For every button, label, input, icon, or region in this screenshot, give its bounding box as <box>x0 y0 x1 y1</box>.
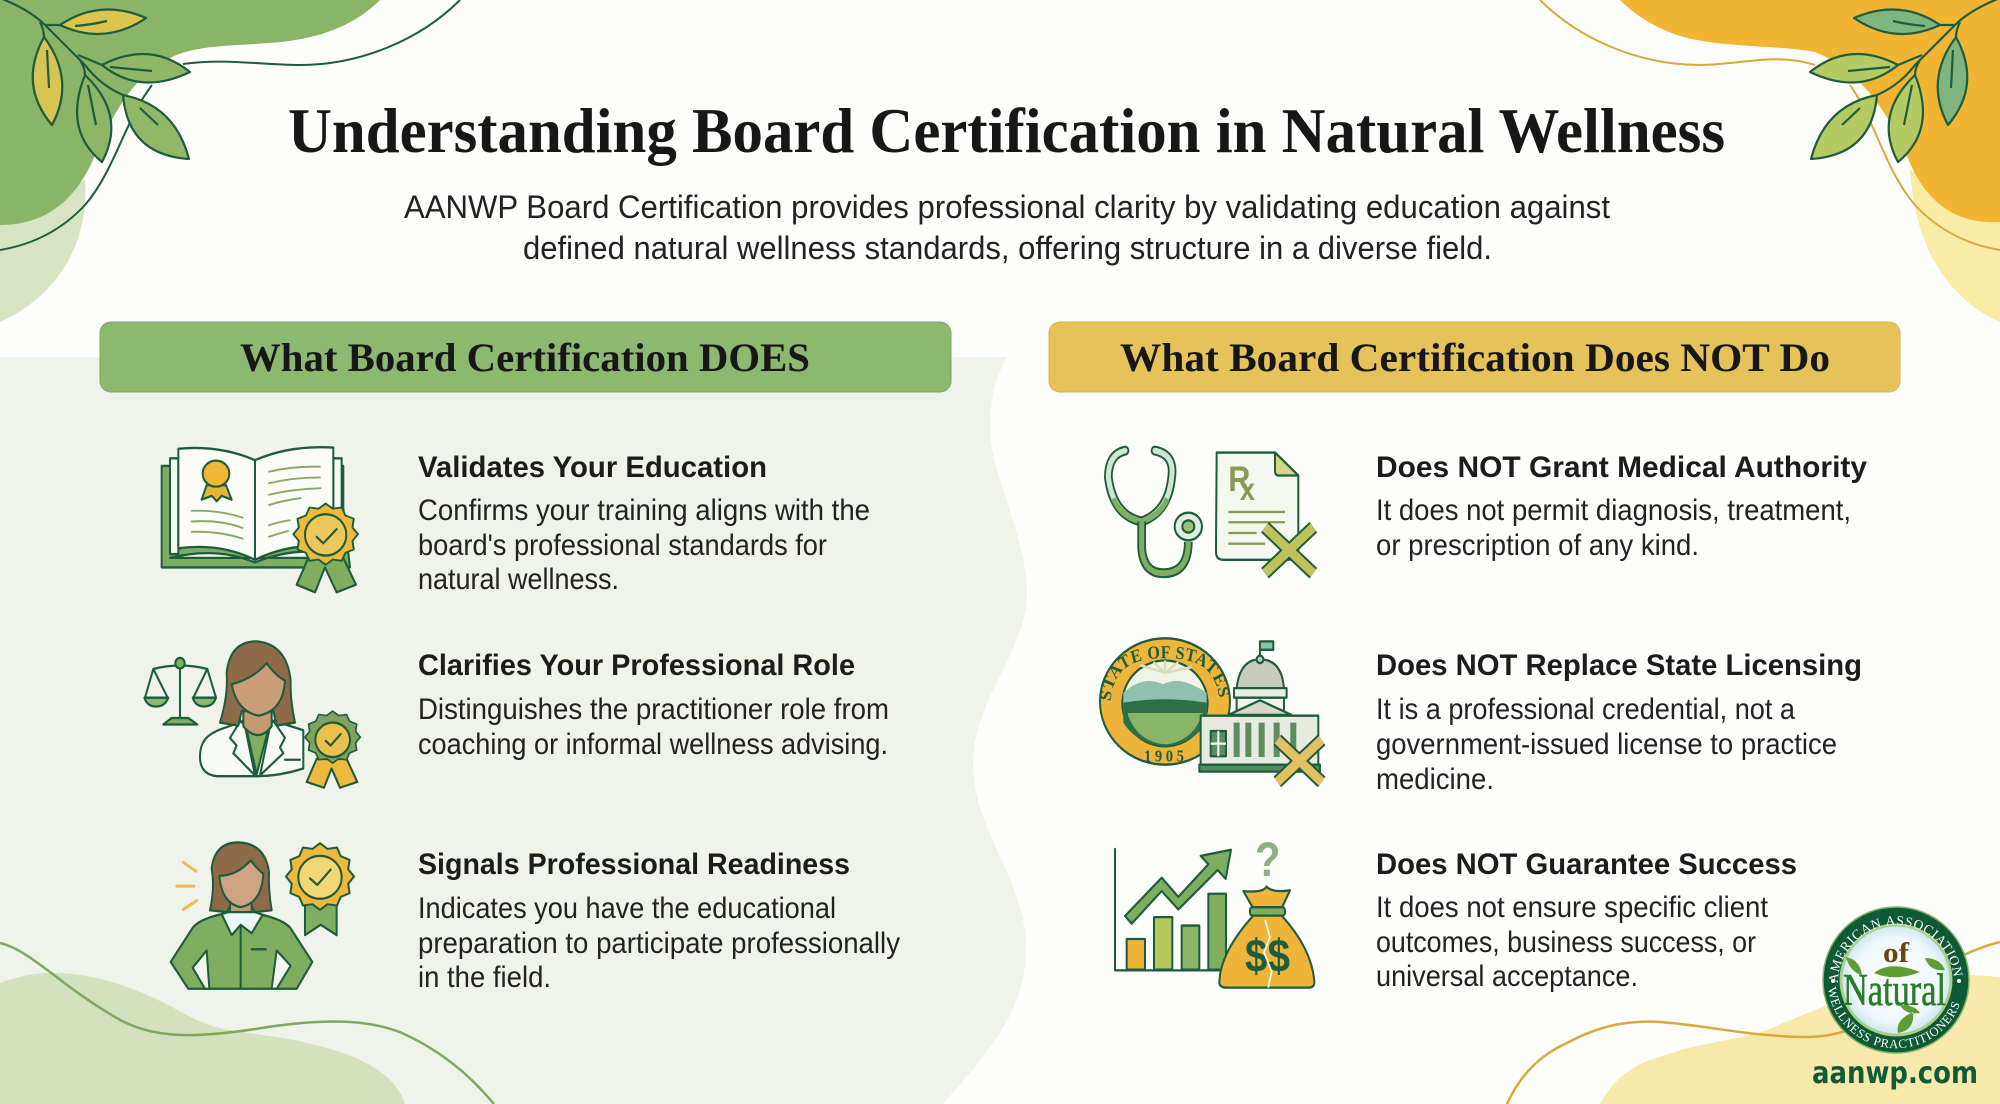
item text: state licensing: medicine. <box>1376 763 1494 796</box>
icon: growth chart and money bag: ? <box>1255 832 1280 886</box>
item text: medical authority: or prescription of any kind. <box>1376 529 1699 562</box>
decoration: bottom left blob and line <box>0 943 494 1104</box>
left panel background <box>0 357 1027 1104</box>
logo: association seal: WELLNESS PRACTITIONERS <box>1828 986 1960 1048</box>
item text: clarifies your professional role: coaching or informal wellness advising. <box>418 728 888 761</box>
item text: guarantee success: Does NOT Guarantee Success <box>1376 848 1797 881</box>
item text: medical authority <box>1376 451 1867 562</box>
item text: signals professional readiness <box>418 848 900 994</box>
logo: association seal: of <box>1883 938 1910 969</box>
icon: state seal and capitol with cross: 1905 <box>1144 748 1184 766</box>
subtitle: AANWP Board Certification provides professional clarity by validating education against <box>404 189 1610 225</box>
icon: open book with seal <box>162 447 358 592</box>
decoration: bottom right blob and line <box>1507 942 2000 1104</box>
decoration: top left blobs <box>0 0 460 322</box>
item text: medical authority: Does NOT Grant Medical Authority <box>1376 451 1867 484</box>
item text: validates your education: Validates Your Education <box>418 451 767 484</box>
item text: validates your education: natural wellness. <box>418 563 619 596</box>
subtitle: defined natural wellness standards, offering structure in a diverse field. <box>523 230 1492 266</box>
heading bar: does: What Board Certification DOES <box>240 335 810 380</box>
logo: association seal: Natural <box>1843 965 1946 1015</box>
item text: validates your education: board's professional standards for <box>418 529 827 562</box>
item text: guarantee success: It does not ensure specific client <box>1376 891 1769 924</box>
icon: state seal and capitol with cross: STATE OF STATES <box>1101 646 1228 700</box>
item text: guarantee success: outcomes, business success, or <box>1376 926 1756 959</box>
item text: clarifies your professional role: Distinguishes the practitioner role from <box>418 693 889 726</box>
icon: growth chart and money bag <box>1115 832 1314 988</box>
heading bar: does not: What Board Certification Does NOT Do <box>1120 335 1830 380</box>
item text: clarifies your professional role <box>418 649 889 761</box>
item text: signals professional readiness: preparation to participate professionally <box>418 927 900 960</box>
icon: state seal and capitol with cross <box>1099 637 1326 788</box>
item text: signals professional readiness: in the field. <box>418 961 551 994</box>
icon: growth chart and money bag: $$ <box>1245 931 1290 982</box>
heading bar: does not <box>1049 322 1900 392</box>
logo: association seal <box>1822 906 1970 1054</box>
heading bar: does <box>100 322 951 392</box>
logo: association seal: AMERICAN ASSOCIATION <box>1829 916 1962 983</box>
website address: aanwp.com <box>1812 1056 1978 1091</box>
decoration: top right blobs <box>1540 0 2000 322</box>
icon: top right leaf branch <box>1810 0 2000 162</box>
item text: validates your education: Confirms your training aligns with the <box>418 494 870 527</box>
item text: signals professional readiness: Signals Professional Readiness <box>418 848 850 881</box>
item text: state licensing: It is a professional credential, not a <box>1376 693 1795 726</box>
subtitle <box>404 189 1610 266</box>
icon: top left leaf branch <box>0 0 190 162</box>
item text: signals professional readiness: Indicates you have the educational <box>418 892 836 925</box>
item text: clarifies your professional role: Clarifies Your Professional Role <box>418 649 855 682</box>
icon: stethoscope and prescription with cross: R <box>1228 459 1250 498</box>
icon: stethoscope and prescription with cross: x <box>1240 472 1256 508</box>
title: Understanding Board Certification in Natural Wellness <box>288 95 1725 166</box>
item text: guarantee success: universal acceptance. <box>1376 960 1638 993</box>
item text: state licensing: government-issued license to practice <box>1376 728 1837 761</box>
item text: state licensing: Does NOT Replace State Licensing <box>1376 649 1862 682</box>
icon: stethoscope and prescription with cross <box>1108 451 1313 573</box>
icon: ready professional with seal <box>171 842 354 989</box>
item text: state licensing <box>1376 649 1862 796</box>
item text: guarantee success <box>1376 848 1797 993</box>
item text: medical authority: It does not permit diagnosis, treatment, <box>1376 494 1851 527</box>
icon: practitioner with scales and seal <box>144 641 360 788</box>
item text: validates your education <box>418 451 870 596</box>
